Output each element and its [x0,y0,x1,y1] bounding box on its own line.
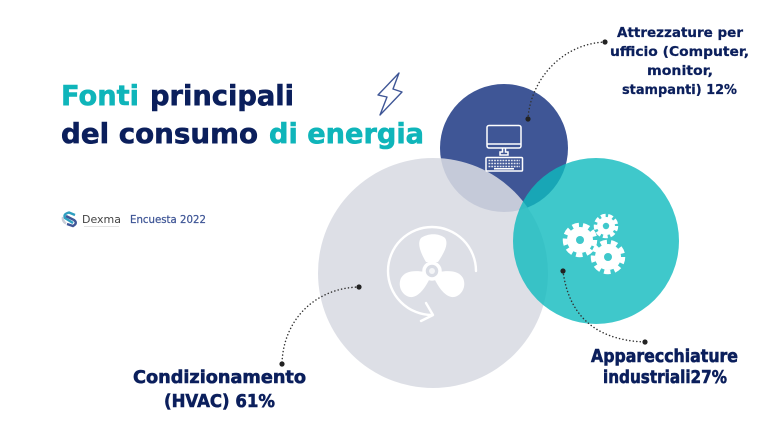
icon: computer [486,126,522,171]
icon: fan [388,227,476,321]
title [61,79,424,150]
circle: office equipment [440,84,568,212]
connector: industrial equipment [560,268,648,345]
title: principali [150,79,294,112]
title: del consumo [61,117,258,150]
label: office equipment [610,25,749,98]
logo: Dexma [63,212,121,227]
circle: HVAC [318,158,548,388]
label: office equipment: monitor, [647,63,713,79]
label: office equipment: ufficio (Computer, [610,44,749,60]
icon: lightning bolt [378,73,402,115]
icon: gears [565,216,623,272]
circle: industrial equipment [513,158,679,324]
title: di energia [269,117,424,150]
label: industrial equipment: Apparecchiature [591,347,738,367]
label: office equipment: Attrezzature per [617,25,743,41]
connector: office equipment [525,39,608,122]
title: Fonti [61,79,139,112]
label: HVAC: Condizionamento [133,368,306,388]
label: HVAC [133,368,306,412]
label: industrial equipment [591,347,738,388]
label: industrial equipment: industriali27% [603,368,727,388]
label: office equipment: stampanti) 12% [622,82,737,98]
logo: Dexma: Dexma [82,213,121,226]
label: HVAC: (HVAC) 61% [164,392,275,412]
survey label: Encuesta 2022 [130,213,206,226]
connector: HVAC [279,284,362,367]
